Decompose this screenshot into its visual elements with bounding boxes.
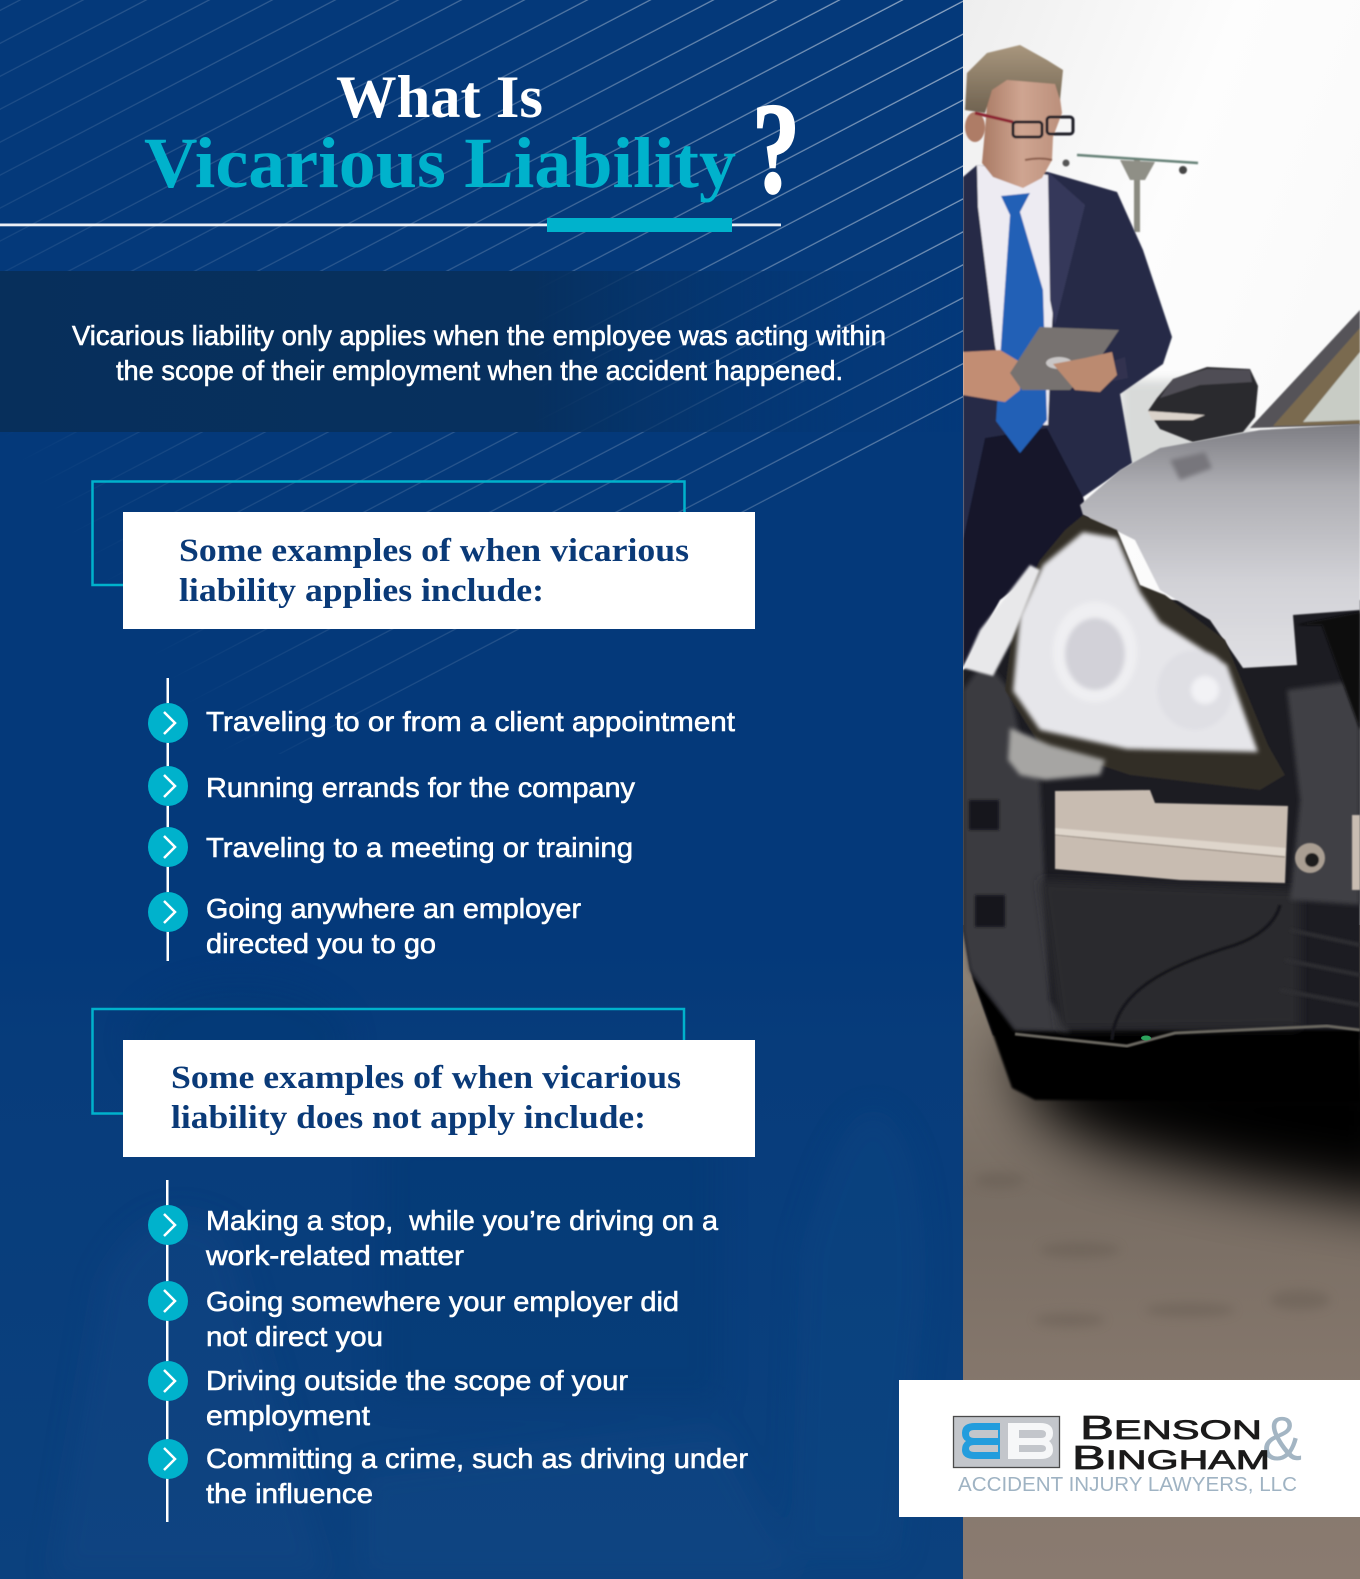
item 2: not direct you [206, 1321, 383, 1352]
item 4 [148, 892, 581, 959]
heading text applies [179, 533, 689, 609]
item 1: work-related matter [205, 1240, 464, 1271]
item 3: Driving outside the scope of your [206, 1365, 628, 1396]
lower bumper [1040, 880, 1300, 1030]
list: does not apply [148, 1180, 748, 1522]
tyre [972, 975, 1360, 1102]
title line 1: What Is [336, 64, 543, 130]
intro text [72, 320, 886, 386]
tie [996, 193, 1047, 453]
intro band [0, 271, 963, 432]
shirt [977, 165, 1057, 425]
heading text applies: Some examples of when vicarious [179, 533, 689, 569]
item 1: Traveling to or from a client appointment [206, 706, 735, 737]
item 1 [148, 1205, 718, 1271]
car underbody [963, 600, 1360, 1040]
item 4: the influence [206, 1478, 373, 1509]
road [963, 925, 1360, 1579]
background car [1120, 380, 1250, 470]
heading text does not apply: liability does not apply include: [171, 1100, 646, 1136]
tablet [1010, 327, 1119, 390]
item 4: Going anywhere an employer [206, 893, 581, 924]
shadow under car [1010, 1040, 1360, 1210]
pocket flap [1114, 358, 1127, 380]
wheel arch liner [963, 660, 1070, 1032]
logo tagline: ACCIDENT INJURY LAWYERS, LLC [958, 1474, 1297, 1496]
logo name: B ENSON [1080, 1409, 1262, 1446]
faded background photo [50, 980, 925, 1579]
left hand [963, 350, 1020, 402]
panel: blue background [0, 0, 963, 1579]
right hand [1053, 352, 1117, 392]
logo box [899, 1380, 1360, 1517]
list: applies [148, 678, 735, 961]
item 2 [148, 1281, 679, 1352]
grille bars [1296, 930, 1360, 1006]
headlight surround [1005, 515, 1285, 790]
utility pole [1062, 155, 1198, 232]
bumper mounting bar [1055, 790, 1360, 890]
question mark: ? [752, 77, 800, 221]
logo name [1072, 1409, 1270, 1476]
logo ampersand: & [1262, 1405, 1302, 1474]
windshield and pillar [1250, 310, 1360, 428]
item 3: employment [206, 1400, 370, 1431]
right bumper panel [1287, 680, 1360, 905]
lapel [1048, 172, 1085, 325]
cable [1112, 905, 1280, 1040]
title line 2: Vicarious Liability [144, 123, 736, 203]
hair [965, 45, 1063, 113]
trousers [963, 428, 1090, 668]
item 3 [148, 1361, 628, 1431]
hood [1080, 424, 1360, 668]
heading text does not apply: Some examples of when vicarious [171, 1060, 681, 1096]
item 3: Traveling to a meeting or training [206, 832, 633, 863]
glasses [975, 113, 1073, 137]
logo emblem [954, 1416, 1060, 1468]
title underline [0, 218, 781, 232]
panel: heading does not apply [92, 1009, 755, 1157]
neck and face [982, 68, 1062, 188]
mouth [1025, 158, 1052, 160]
panel: heading applies [92, 482, 755, 629]
item 4 [148, 1439, 748, 1509]
item 4: Committing a crime, such as driving under [206, 1443, 748, 1474]
heading text does not apply [171, 1060, 681, 1136]
man [963, 45, 1172, 668]
jacket [963, 165, 1172, 540]
diagonal stripes [0, 0, 963, 800]
item 4: directed you to go [206, 928, 436, 959]
intro text: the scope of their employment when the accident happened. [116, 355, 843, 386]
item 2: Running errands for the company [206, 772, 635, 803]
lower trim [1015, 1026, 1360, 1046]
ear [965, 112, 985, 142]
wing mirror [1148, 367, 1258, 442]
clips [969, 800, 1005, 927]
item 1: Making a stop, while you’re driving on a [206, 1205, 718, 1236]
headlight [1013, 532, 1258, 752]
fender strip [963, 565, 1040, 676]
broken trim [1008, 728, 1105, 780]
item 1 [148, 703, 735, 743]
item 2: Going somewhere your employer did [206, 1286, 679, 1317]
item 2 [148, 766, 635, 806]
intro text: Vicarious liability only applies when the employee was acting within [72, 320, 886, 351]
title [144, 64, 800, 221]
photo: lawyer and damaged car [963, 0, 1360, 1579]
logo name: B INGHAM [1072, 1439, 1270, 1476]
heading text applies: liability applies include: [179, 573, 544, 609]
item 3 [148, 827, 633, 867]
